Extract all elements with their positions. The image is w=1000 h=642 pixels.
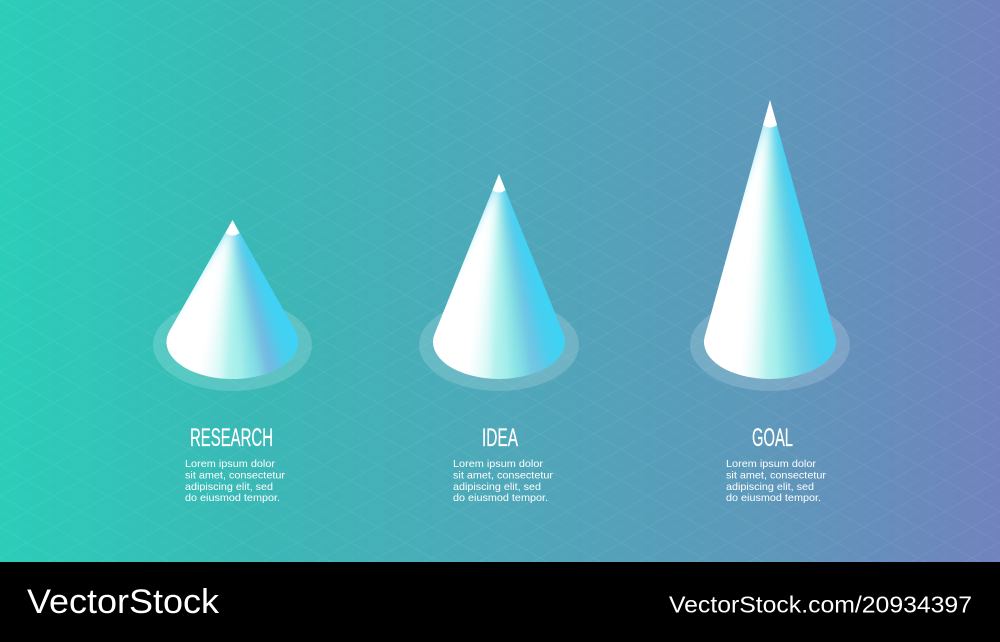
text block: research: adipiscing elit, sed: [185, 481, 273, 493]
footer bar: [0, 562, 1000, 642]
cone body: goal: [704, 100, 836, 379]
cone: research: [153, 220, 312, 391]
cone: goal: [690, 100, 850, 391]
cone tip: goal: [763, 100, 777, 128]
text block: research: Lorem ipsum dolor: [185, 458, 276, 470]
text block: idea: adipiscing elit, sed: [453, 481, 541, 493]
footer logo: VectorStock: [27, 583, 220, 621]
footer url: VectorStock.com/20934397: [669, 592, 972, 618]
cone body: idea: [433, 174, 565, 379]
cone tip: research: [226, 220, 240, 236]
halo: idea: [419, 299, 579, 391]
text block: idea: IDEA: [482, 424, 518, 452]
halo: goal: [690, 299, 850, 391]
cone body: research: [166, 220, 298, 379]
cone: idea: [419, 174, 579, 391]
text block: goal: Lorem ipsum dolor: [726, 458, 817, 470]
text block: idea: do eiusmod tempor.: [453, 492, 548, 504]
text block: research: do eiusmod tempor.: [185, 492, 280, 504]
cone tip: idea: [492, 174, 506, 192]
text block: goal: GOAL: [752, 424, 793, 452]
halo: research: [153, 299, 312, 391]
text block: research: [185, 424, 286, 504]
text block: research: sit amet, consectetur: [185, 470, 286, 482]
text block: goal: adipiscing elit, sed: [726, 481, 814, 493]
text block: research: RESEARCH: [190, 424, 273, 452]
text block: idea: [453, 424, 554, 504]
text block: idea: sit amet, consectetur: [453, 470, 554, 482]
text block: goal: sit amet, consectetur: [726, 470, 827, 482]
text block: idea: Lorem ipsum dolor: [453, 458, 544, 470]
text block: goal: [726, 424, 827, 504]
text block: goal: do eiusmod tempor.: [726, 492, 821, 504]
